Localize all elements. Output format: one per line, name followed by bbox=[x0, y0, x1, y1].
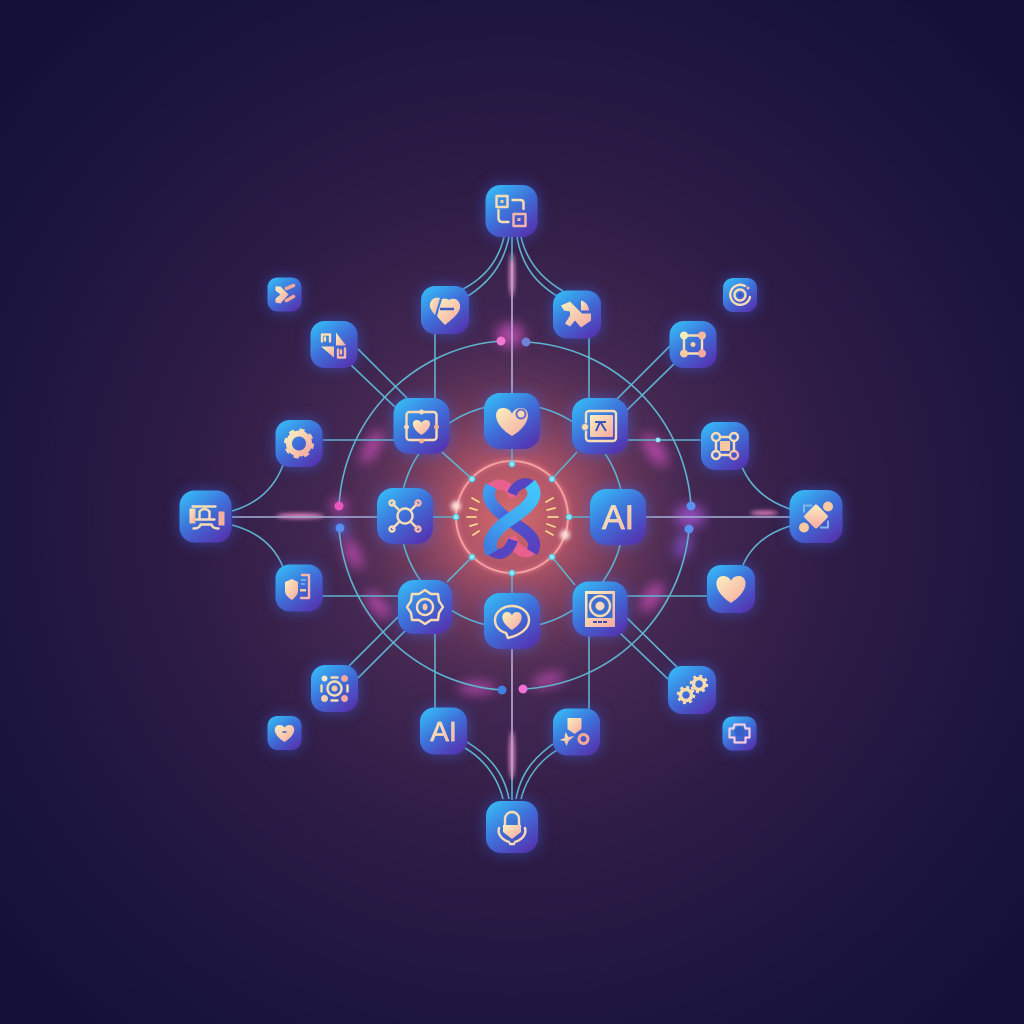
icon: twist arrows bbox=[561, 300, 591, 328]
center sparks bbox=[467, 498, 558, 535]
tile: network hub bbox=[377, 488, 433, 544]
tile: robot workstation bbox=[180, 490, 232, 542]
icon: framed heart bbox=[404, 410, 439, 444]
tile: tablet bbox=[572, 582, 628, 636]
icon: chevrons bbox=[276, 286, 294, 304]
icon: heart bbox=[496, 408, 528, 436]
icon: broken heart bbox=[430, 298, 460, 325]
central ring bbox=[451, 461, 572, 576]
icon: nodes square bbox=[680, 332, 706, 358]
tile: small shield outline bbox=[722, 716, 756, 750]
icon: robot workstation bbox=[190, 506, 224, 528]
icon: framed arrow bbox=[582, 411, 616, 441]
icon: diamond and dots bbox=[799, 502, 833, 532]
tile: shield and phone bbox=[276, 564, 322, 612]
icon: heart bbox=[275, 725, 294, 742]
tile: shield and shapes bbox=[553, 708, 600, 756]
tile: small chevrons bbox=[268, 278, 302, 312]
icon: shield and phone bbox=[285, 575, 309, 600]
tile: gear bbox=[276, 420, 322, 467]
label: AI: AI bbox=[602, 499, 634, 537]
icon: shield outline bbox=[730, 724, 750, 742]
icon: QR bbox=[496, 196, 526, 226]
connector lines bbox=[232, 237, 790, 800]
outer arc end dots bbox=[334, 336, 696, 694]
icon: double gears bbox=[678, 676, 707, 703]
icon: document shapes bbox=[321, 332, 346, 358]
tile: small target bbox=[723, 278, 757, 312]
icon: heart bbox=[716, 576, 746, 603]
tile: double gears bbox=[668, 666, 716, 714]
tile: chat heart bbox=[484, 593, 540, 649]
tile: heart with dot bbox=[484, 393, 540, 449]
tile: nodes cross bbox=[701, 422, 749, 470]
tile: lock bbox=[486, 801, 538, 853]
icon: target bbox=[730, 285, 750, 305]
tile: arrows bbox=[553, 290, 601, 338]
icon: focus ring bbox=[321, 675, 348, 702]
tile: small heart bbox=[268, 716, 302, 750]
tile: framed heart bbox=[394, 398, 450, 454]
tile: nodes square bbox=[670, 321, 716, 368]
tile: focus ring bbox=[311, 665, 358, 712]
icon: network hub bbox=[390, 500, 420, 532]
tile: framed arrow bbox=[572, 398, 628, 454]
icon: gear bbox=[286, 430, 312, 456]
pink glow accents bbox=[276, 253, 778, 779]
label: AI: AI bbox=[430, 716, 457, 747]
central glow bbox=[327, 331, 697, 701]
tile: broken heart bbox=[421, 286, 469, 334]
tile: heart right bbox=[707, 565, 755, 613]
icon: tablet bbox=[585, 591, 615, 627]
icon: lock mic bbox=[499, 812, 525, 844]
tile: badge bbox=[398, 580, 452, 634]
icon: shield and shapes bbox=[560, 718, 588, 746]
icon: nodes cross bbox=[712, 433, 738, 459]
center icon: infinity heart ribbon bbox=[489, 483, 534, 554]
icon: chat heart bbox=[495, 606, 529, 638]
tile: AI bbox=[590, 489, 646, 545]
tile: QR bbox=[486, 185, 538, 237]
tile: diamond and dots bbox=[790, 490, 842, 543]
tile: document shapes bbox=[310, 321, 358, 368]
icon: starburst badge bbox=[407, 590, 443, 624]
tile: AI lower bbox=[420, 708, 467, 754]
